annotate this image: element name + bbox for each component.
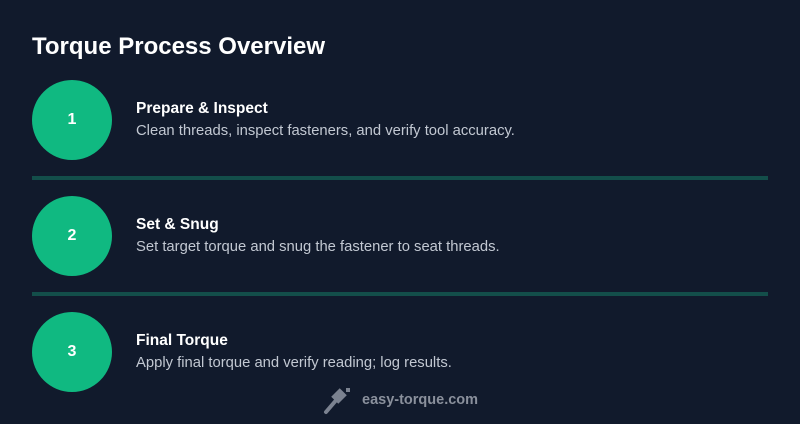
heading 3: Final Torque — [136, 332, 228, 349]
step 3 — [32, 312, 452, 392]
heading 1: Prepare & Inspect — [136, 100, 268, 117]
footer brand — [324, 388, 478, 414]
circle 1: 1 — [68, 111, 76, 128]
circle 1 — [32, 80, 112, 160]
title: Torque Process Overview — [32, 33, 325, 60]
icon: hammer — [324, 388, 350, 414]
step 2 — [32, 196, 500, 276]
step 1 — [32, 80, 515, 160]
circle 3: 3 — [68, 343, 76, 360]
text 3: Apply final torque and verify reading; log results. — [136, 355, 452, 371]
text 1: Clean threads, inspect fasteners, and verify tool accuracy. — [136, 123, 515, 139]
circle 2: 2 — [68, 227, 76, 244]
circle 2 — [32, 196, 112, 276]
text 2: Set target torque and snug the fastener to seat threads. — [136, 239, 500, 255]
brand text: easy-torque.com — [362, 392, 478, 408]
heading 2: Set & Snug — [136, 216, 219, 233]
circle 3 — [32, 312, 112, 392]
